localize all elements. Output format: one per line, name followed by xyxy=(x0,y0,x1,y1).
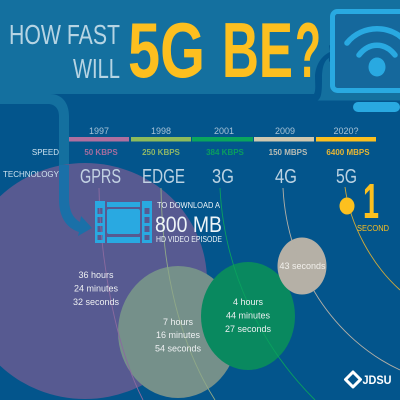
film right strip xyxy=(142,201,152,243)
number 1: 1 xyxy=(363,175,379,229)
logo diamond xyxy=(346,372,360,387)
bar: GPRS xyxy=(69,137,129,142)
bar: 5G xyxy=(316,137,376,142)
icon: film strip xyxy=(95,201,152,243)
speed: 5G: 6400 MBPS xyxy=(326,148,370,157)
curve: 3G xyxy=(220,188,315,400)
title line: will: WILL xyxy=(73,53,120,84)
arrow: from panel up to monitor xyxy=(306,45,340,101)
technologies xyxy=(80,166,357,188)
circle: GPRS xyxy=(0,163,207,399)
EDGE duration xyxy=(155,317,202,354)
circle: EDGE xyxy=(118,266,238,398)
hours: 36 hours xyxy=(78,270,114,280)
bar: EDGE xyxy=(131,137,191,142)
5G dot xyxy=(340,198,354,214)
timeline xyxy=(69,126,376,142)
text: 800 MB: 800 MB xyxy=(155,212,222,237)
minutes: 24 minutes xyxy=(74,284,119,294)
wifi inner arc xyxy=(359,45,395,55)
year 2001: 2001 xyxy=(214,126,234,136)
GPRS duration xyxy=(73,270,120,307)
logo: JDSU xyxy=(346,372,392,387)
circle: 4G xyxy=(278,238,326,294)
panel: dark lower area xyxy=(0,94,400,400)
wifi dot xyxy=(368,58,386,76)
row labels xyxy=(3,148,60,179)
label: speed: SPEED xyxy=(32,148,59,157)
minutes: 44 minutes xyxy=(226,310,271,320)
speed: 3G: 384 KBPS xyxy=(206,148,245,157)
curve: EDGE xyxy=(161,188,215,400)
curve: GPRS xyxy=(99,188,143,400)
tech: EDGE: EDGE xyxy=(142,166,185,188)
logo text: JDSU xyxy=(362,373,392,387)
3G duration xyxy=(225,297,272,334)
label: technology: TECHNOLOGY xyxy=(3,170,60,179)
timeline years xyxy=(89,126,359,136)
arrow: from title down to video icon xyxy=(0,94,92,236)
monitor frame xyxy=(332,12,400,90)
speeds xyxy=(84,148,370,157)
film frame bottom xyxy=(107,237,140,243)
year 1997: 1997 xyxy=(89,126,109,136)
year 1998: 1998 xyxy=(151,126,171,136)
text: to download a: TO DOWNLOAD A xyxy=(157,201,221,210)
title: 5G: 5G xyxy=(128,6,205,94)
curve: 4G xyxy=(283,188,400,370)
text: HD video episode: HD VIDEO EPISODE xyxy=(156,235,222,244)
4G duration: 43 seconds xyxy=(279,261,326,271)
tech: 5G: 5G xyxy=(336,166,357,188)
bar: 4G xyxy=(254,137,314,142)
speed: EDGE: 250 KBPS xyxy=(142,148,181,157)
tech: GPRS: GPRS xyxy=(80,166,121,188)
wifi outer arc xyxy=(347,29,400,43)
year 2009: 2009 xyxy=(275,126,295,136)
curve: 5G xyxy=(345,187,400,290)
hours: 4 hours xyxy=(233,297,264,307)
year 2020: 2020? xyxy=(333,126,359,136)
tech: 4G: 4G xyxy=(275,166,297,188)
arrow: lower part over GPRS circle xyxy=(59,165,92,236)
speed: 4G: 150 MBPS xyxy=(269,148,308,157)
download text xyxy=(155,201,222,244)
icon: monitor with wifi xyxy=(332,12,400,112)
5G one second xyxy=(357,175,389,233)
timeline curves xyxy=(99,187,400,400)
film frame centre xyxy=(107,209,140,234)
seconds: 27 seconds xyxy=(225,324,272,334)
monitor stand xyxy=(353,102,400,112)
minutes: 16 minutes xyxy=(156,330,201,340)
tech: 3G: 3G xyxy=(212,166,234,188)
bar: 3G xyxy=(192,137,253,142)
film frame top xyxy=(107,202,140,207)
film left strip xyxy=(95,201,105,243)
title line: how fast: HOW FAST xyxy=(9,19,120,50)
title xyxy=(9,6,321,94)
title: BE: BE xyxy=(222,6,293,94)
seconds: 32 seconds xyxy=(73,297,120,307)
hours: 7 hours xyxy=(163,317,194,327)
circle: 3G xyxy=(201,262,295,370)
title: question mark: ? xyxy=(295,6,321,94)
speed: GPRS: 50 KBPS xyxy=(84,148,118,157)
seconds: 54 seconds xyxy=(155,344,202,354)
label second: SECOND xyxy=(357,224,389,233)
